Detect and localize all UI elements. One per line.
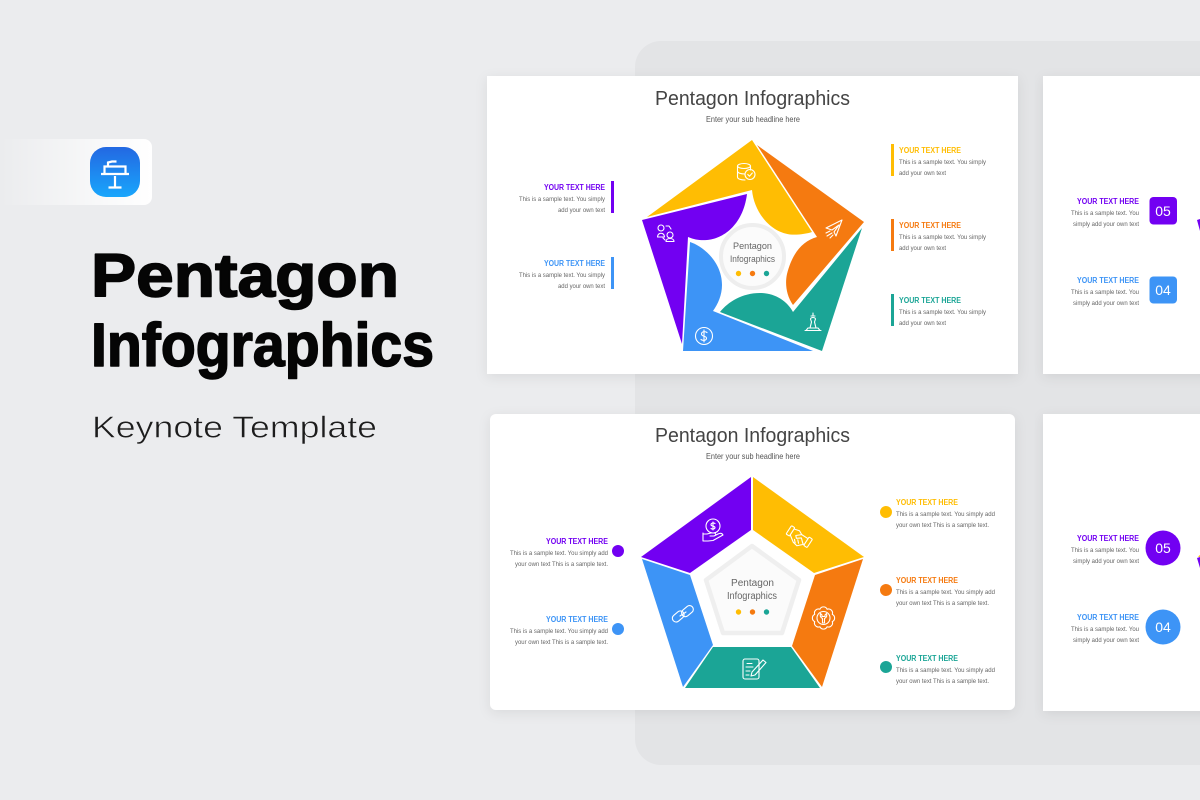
callout: blue: This is a sample text. You simply add (510, 628, 608, 635)
callout: 05: simply add your own text (1073, 558, 1139, 565)
callout: orange: This is a sample text. You simply (899, 234, 987, 241)
callout: orange: add your own text (899, 245, 946, 252)
callout: 04: This is a sample text. You (1071, 626, 1139, 633)
icon: hand with coin (703, 519, 723, 541)
panel: slide one (487, 76, 1018, 374)
pentagon chart: segmented (641, 477, 864, 688)
callout: yellow: add your own text (899, 170, 946, 177)
icon: database check (738, 164, 755, 180)
callout: orange: This is a sample text. You simply add (896, 589, 995, 596)
callout: teal: This is a sample text. You simply add (896, 667, 995, 674)
segment yellow (647, 140, 812, 235)
pentagon chart: curved (642, 140, 864, 351)
segment blue (683, 242, 813, 351)
title (91, 242, 434, 379)
chart sliver (1197, 219, 1200, 231)
callout: blue: This is a sample text. You simply (519, 272, 606, 279)
sub headline: Enter your sub headline here (706, 114, 800, 124)
callout: 04: simply add your own text (1073, 637, 1139, 644)
callout: yellow: This is a sample text. You simply (899, 159, 987, 166)
callout: 05: simply add your own text (1073, 221, 1139, 228)
panel: slide two (490, 414, 1015, 710)
callout: teal: your own text This is a sample text. (896, 678, 989, 685)
segment purple (642, 194, 747, 344)
callout: 04 (1071, 610, 1180, 644)
callout: teal: YOUR TEXT HERE (899, 296, 962, 305)
app badge (0, 139, 152, 205)
title: Pentagon (91, 242, 399, 310)
icon: paper plane (826, 220, 842, 238)
callout: teal (891, 294, 987, 327)
heading: Pentagon Infographics (655, 88, 850, 110)
callout: blue: YOUR TEXT HERE (546, 615, 609, 624)
callout: purple: your own text This is a sample text. (515, 561, 608, 568)
callout: 05: This is a sample text. You (1071, 210, 1139, 217)
icon: gear wrench (812, 607, 835, 629)
icon: chess piece (805, 313, 821, 330)
callout: 05: 05 (1155, 203, 1171, 219)
callout: yellow (880, 498, 995, 529)
callout: 05 (1071, 530, 1180, 566)
callout: yellow: This is a sample text. You simply add (896, 511, 995, 518)
callout: yellow: YOUR TEXT HERE (899, 146, 962, 155)
callout: orange: YOUR TEXT HERE (899, 221, 962, 230)
segment teal (720, 228, 862, 351)
callout: 04: YOUR TEXT HERE (1077, 276, 1140, 285)
panel: slide four cropped (1043, 414, 1200, 711)
segment orange (757, 145, 864, 305)
callout: teal: add your own text (899, 320, 946, 327)
center pentagon: Infographics (727, 591, 777, 602)
center badge: Pentagon (733, 241, 772, 252)
background panel (635, 41, 1200, 765)
segment yellow (753, 477, 864, 573)
callout: purple (519, 181, 614, 214)
callout: purple: YOUR TEXT HERE (544, 183, 606, 192)
sub headline: Enter your sub headline here (706, 451, 800, 461)
callout: 05: YOUR TEXT HERE (1077, 197, 1140, 206)
callout: teal: This is a sample text. You simply (899, 309, 987, 316)
chart sliver (1197, 555, 1200, 568)
callout: orange (880, 576, 995, 607)
panel: slide three cropped (1043, 76, 1200, 374)
segment orange (792, 559, 863, 687)
callout: purple: add your own text (558, 207, 605, 214)
icon: note and pen (743, 659, 766, 679)
center badge: Infographics (730, 254, 775, 265)
callout: 05: 05 (1155, 540, 1171, 556)
icon: dollar circle (696, 328, 712, 344)
callout: blue: your own text This is a sample text. (515, 639, 608, 646)
callout: yellow (891, 144, 987, 177)
callout: blue (519, 257, 614, 290)
center badge (721, 225, 784, 288)
title: Infographics (91, 311, 434, 379)
callout: purple: YOUR TEXT HERE (546, 537, 609, 546)
center pentagon (706, 546, 799, 633)
icon: users swap (658, 225, 674, 242)
subtitle: Keynote Template (92, 410, 377, 444)
callout: blue (510, 615, 624, 646)
callout: 05 (1071, 197, 1177, 228)
callout: 05: YOUR TEXT HERE (1077, 534, 1140, 543)
callout: purple: This is a sample text. You simply (519, 196, 606, 203)
callout: teal: YOUR TEXT HERE (896, 654, 959, 663)
heading: Pentagon Infographics (655, 425, 850, 447)
callout: blue: YOUR TEXT HERE (544, 259, 606, 268)
callout: blue: add your own text (558, 283, 605, 290)
callout: 04: YOUR TEXT HERE (1077, 613, 1140, 622)
callout: 05: This is a sample text. You (1071, 547, 1139, 554)
center pentagon: Pentagon (731, 578, 774, 589)
callout: purple: This is a sample text. You simply add (510, 550, 608, 557)
callout: 04: This is a sample text. You (1071, 289, 1139, 296)
callout: 04: 04 (1155, 282, 1171, 298)
callout: 04: simply add your own text (1073, 300, 1139, 307)
callout: teal (880, 654, 995, 685)
icon: keynote (90, 147, 140, 197)
icon: chain link (671, 604, 695, 624)
callout: orange: YOUR TEXT HERE (896, 576, 959, 585)
callout: yellow: YOUR TEXT HERE (896, 498, 959, 507)
callout: orange: your own text This is a sample text. (896, 600, 989, 607)
segment purple (641, 477, 751, 573)
callout: yellow: your own text This is a sample text. (896, 522, 989, 529)
badge strip (0, 139, 152, 205)
segment teal (685, 647, 820, 688)
callout: purple (510, 537, 624, 568)
callout: 04 (1071, 276, 1177, 307)
callout: 04: 04 (1155, 619, 1171, 635)
callout: orange (891, 219, 987, 252)
icon: handshake (784, 526, 812, 551)
segment blue (642, 559, 713, 687)
